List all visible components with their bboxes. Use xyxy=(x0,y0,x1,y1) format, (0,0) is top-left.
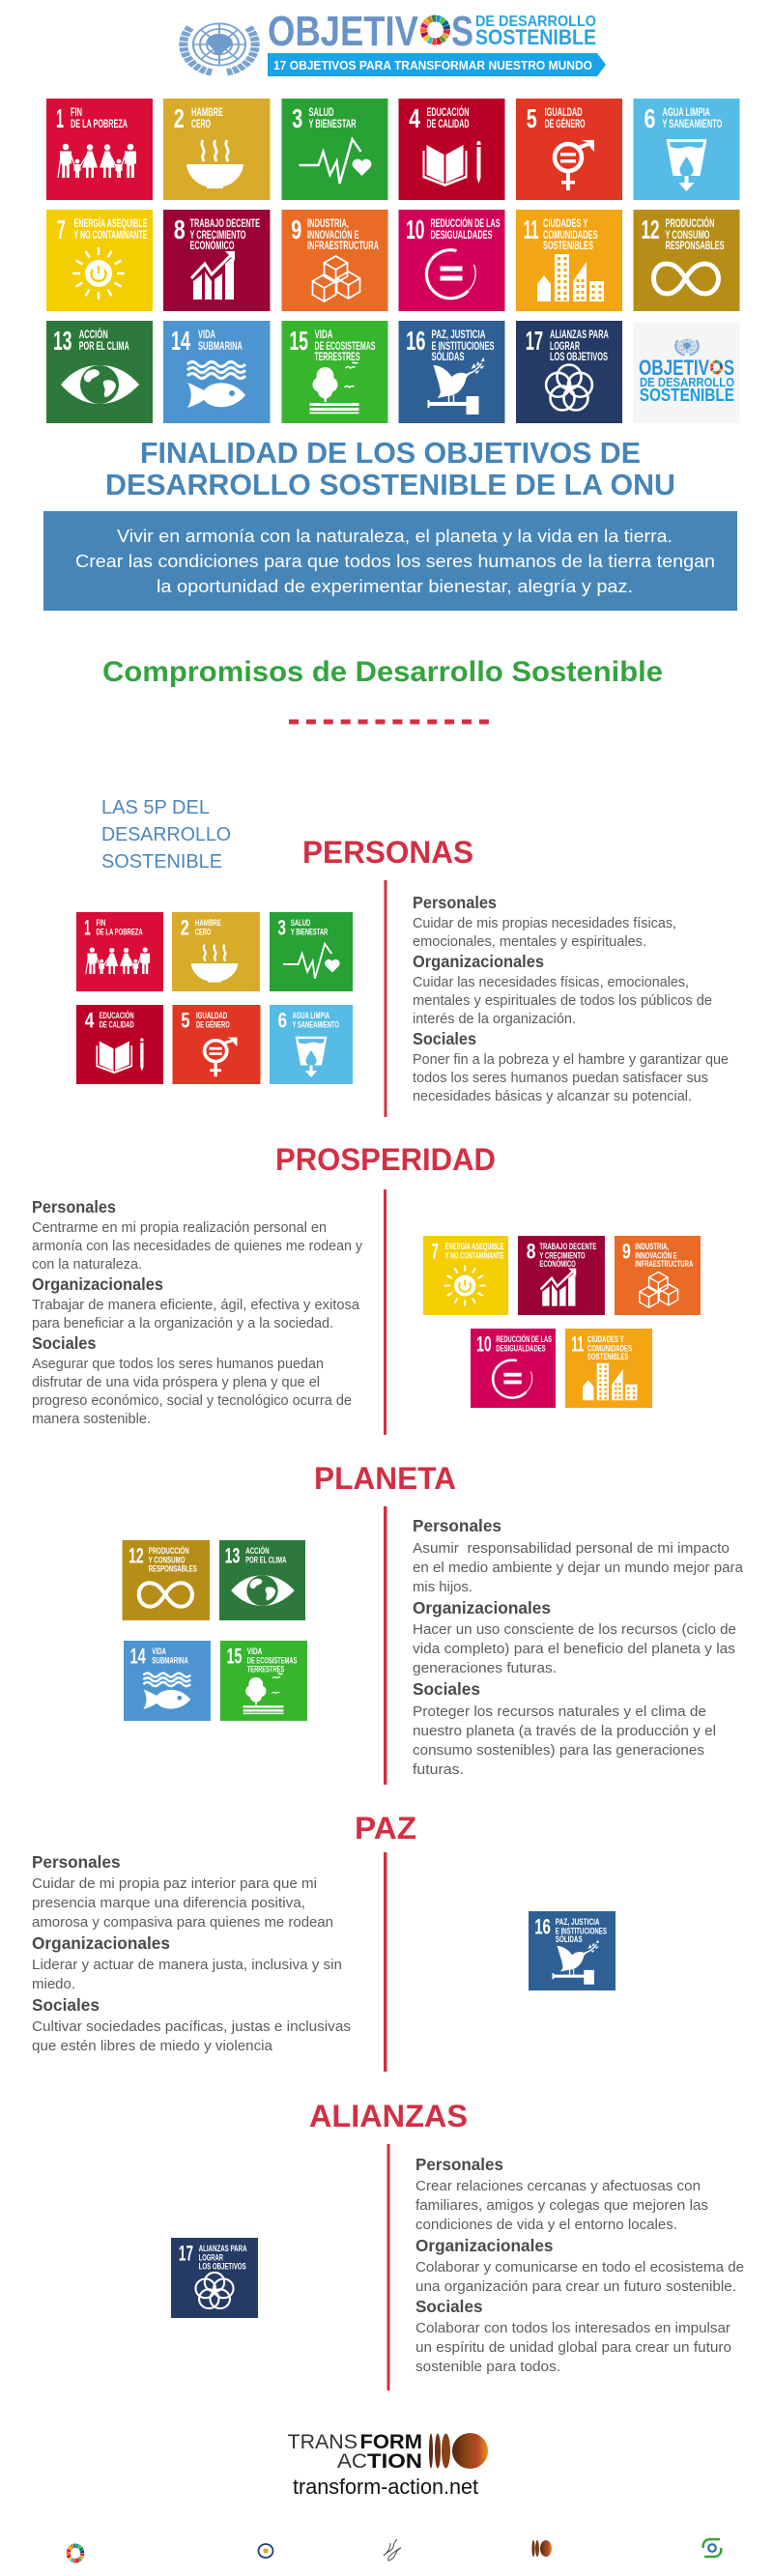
tile: SDG logo xyxy=(634,323,740,423)
goal tiles 12 to 15: VIDA xyxy=(247,1646,262,1657)
text: commitments paz: Liderar y actuar de manera justa, inclusiva y sin xyxy=(32,1957,342,1973)
goal tiles 1 to 6: Y SANEAMIENTO xyxy=(292,1019,339,1029)
tile: goal 16 xyxy=(398,321,504,423)
text: commitments prosperidad: manera sostenible. xyxy=(32,1411,151,1427)
goal tile 17: ALIANZAS PARA xyxy=(199,2244,247,2254)
text: commitments planeta xyxy=(413,1516,744,1778)
text: commitments planeta: mis hijos. xyxy=(413,1579,472,1595)
tile: goal 13: ACCIÓN xyxy=(79,327,108,341)
tile: goal 11 xyxy=(516,210,622,311)
text: commitments personas: mentales y espirituales de todos los públicos de xyxy=(413,992,712,1009)
tile: goal 8: 8 xyxy=(174,215,186,244)
text: commitments prosperidad: disfrutar de una vida próspera y plena y que el xyxy=(32,1374,320,1390)
tile: goal 3 xyxy=(282,99,388,200)
goal tiles 1 to 6: 2 xyxy=(181,916,189,939)
link: website: transform-action.net xyxy=(293,2475,478,2499)
text: commitments alianzas: Colaborar y comunicarse en todo el ecosistema de xyxy=(415,2259,744,2275)
subheading: las 5P xyxy=(101,797,231,873)
goal tiles 7 to 11: INNOVACIÓN E xyxy=(635,1250,677,1261)
goal tiles 12 to 15: 13 xyxy=(225,1544,240,1568)
text: commitments alianzas: Personales xyxy=(415,2155,503,2174)
text: commitments planeta: Personales xyxy=(413,1516,501,1535)
tile: goal 5: DE GÉNERO xyxy=(545,116,586,130)
tile: goal 13 xyxy=(46,321,153,423)
tile: goal 2: HAMBRE xyxy=(191,105,223,119)
heading: alianzas: ALIANZAS xyxy=(309,2099,468,2133)
tile: goal 16: PAZ, JUSTICIA xyxy=(431,328,486,341)
tile: goal 2 xyxy=(163,99,271,200)
text: commitments planeta: Hacer un uso consciente de los recursos (ciclo de xyxy=(413,1621,736,1638)
goal tiles 7 to 11: CIUDADES Y xyxy=(587,1334,624,1345)
text: commitments alianzas xyxy=(415,2155,744,2375)
tile: goal 8: TRABAJO DECENTE xyxy=(189,216,260,230)
goal tile 17: LOGRAR xyxy=(199,2253,223,2264)
subheading: las 5P: SOSTENIBLE xyxy=(101,851,222,873)
goal tiles 12 to 15: PRODUCCIÓN xyxy=(149,1545,189,1557)
goal tiles 1 to 6: 4 xyxy=(85,1009,95,1032)
tile: goal 4 xyxy=(398,99,504,200)
subheading: las 5P: DESARROLLO xyxy=(101,824,231,845)
goal tiles 12 to 15 xyxy=(122,1540,307,1721)
tile: goal 9: INDUSTRIA, xyxy=(307,216,349,230)
logo: transform action: AC xyxy=(337,2450,367,2473)
heading: prosperidad: PROSPERIDAD xyxy=(275,1142,496,1177)
panel: purpose statement: la oportunidad de experimentar bienestar, alegría y paz. xyxy=(157,577,633,596)
tile: goal 14: VIDA xyxy=(198,328,215,341)
tile: SDG logo: S xyxy=(724,356,734,380)
goal tiles 12 to 15: VIDA xyxy=(152,1646,166,1657)
logo: transform action: FORM xyxy=(359,2431,422,2453)
goal tiles 7 to 11: ECONÓMICO xyxy=(539,1258,576,1270)
goal tiles 7 to 11: TRABAJO DECENTE xyxy=(539,1242,596,1252)
goal tiles 1 to 6: 1 xyxy=(84,916,91,939)
goal tiles 12 to 15: 15 xyxy=(227,1645,242,1669)
tile: goal 12: Y CONSUMO xyxy=(665,228,709,242)
tile: goal 11: COMUNIDADES xyxy=(543,228,598,242)
goal tiles 12 to 15: 14 xyxy=(130,1645,146,1669)
tile: goal 15 xyxy=(282,321,388,423)
goal tiles 12 to 15: TERRESTRES xyxy=(247,1665,285,1674)
goal tile 17 xyxy=(171,2238,258,2318)
tile: goal 4: 4 xyxy=(409,103,420,133)
title: sostenible: SOSTENIBLE xyxy=(475,25,596,49)
tile: goal 8: Y CRECIMIENTO xyxy=(189,228,245,242)
tile: goal 17: ALIANZAS PARA xyxy=(550,328,609,341)
text: commitments paz xyxy=(32,1852,351,2054)
text: commitments planeta: Sociales xyxy=(413,1679,480,1699)
goal tiles 1 to 6: CERO xyxy=(195,928,212,937)
icon: green swirl xyxy=(703,2539,721,2557)
banner arrow xyxy=(268,53,606,76)
heading: compromisos: Compromisos de Desarrollo Sostenible xyxy=(102,656,663,688)
tile: goal 15: TERRESTRES xyxy=(315,350,359,363)
text: commitments personas: interés de la organización. xyxy=(413,1011,576,1027)
tile: goal 16: 16 xyxy=(406,326,425,356)
tile: goal 17: LOGRAR xyxy=(550,339,580,353)
text: commitments planeta: Asumir responsabilidad personal de mi impacto xyxy=(413,1540,730,1557)
text: commitments prosperidad: Centrarme en mi propia realización personal en xyxy=(32,1219,327,1236)
icon: UN emblem xyxy=(184,23,255,72)
tile: goal 7: ENERGÍA ASEQUIBLE xyxy=(73,215,147,230)
goal tile 16: SÓLIDAS xyxy=(556,1933,583,1945)
logo: transform action: TRANS xyxy=(288,2431,358,2453)
goal tiles 7 to 11: Y CRECIMIENTO xyxy=(539,1251,586,1261)
text: commitments planeta: nuestro planeta (a través de la producción y el xyxy=(413,1723,716,1739)
icon: colored ring xyxy=(419,14,451,46)
tile: goal 7 xyxy=(46,210,153,311)
banner text: 17 OBJETIVOS PARA TRANSFORMAR NUESTRO MUNDO xyxy=(273,59,592,72)
goal tiles 12 to 15: RESPONSABLES xyxy=(149,1564,197,1574)
heading: personas: PERSONAS xyxy=(302,835,473,870)
tile: goal 5 xyxy=(516,99,622,200)
tile: goal 9: INFRAESTRUCTURA xyxy=(307,239,379,252)
title: final letter: S xyxy=(451,8,473,55)
tile: goal 16: E INSTITUCIONES xyxy=(431,339,495,353)
goal tiles 1 to 6: FIN xyxy=(96,918,105,929)
text: commitments prosperidad: Asegurar que todos los seres humanos puedan xyxy=(32,1356,324,1372)
tile: goal 1 xyxy=(46,99,153,200)
text: commitments planeta: futuras. xyxy=(413,1761,464,1778)
heading: planeta: PLANETA xyxy=(314,1461,456,1496)
goal tiles 12 to 15: POR EL CLIMA xyxy=(245,1556,286,1566)
tile: goal 9: INNOVACIÓN E xyxy=(307,227,359,242)
text: commitments paz: Cultivar sociedades pacíficas, justas e inclusivas xyxy=(32,2018,351,2035)
text: commitments personas: todos los seres humanos puedan satisfacer sus xyxy=(413,1070,708,1086)
tile: goal 12: PRODUCCIÓN xyxy=(665,215,715,230)
goal tiles 1 to 6: 5 xyxy=(181,1009,189,1032)
logo: transform action xyxy=(288,2431,488,2473)
goal tiles 7 to 11: 11 xyxy=(571,1332,584,1356)
text: commitments paz: presencia marque una diferencia positiva, xyxy=(32,1895,305,1911)
tile: goal 3: Y BIENESTAR xyxy=(309,117,357,130)
tile: goal 15: VIDA xyxy=(315,328,333,341)
text: commitments paz: Organizacionales xyxy=(32,1933,170,1953)
goal tiles 7 to 11: INDUSTRIA, xyxy=(635,1242,669,1252)
tile: goal 10: REDUCCIÓN DE LAS xyxy=(431,215,501,230)
tile: goal 8 xyxy=(163,210,271,311)
tile: goal 3: 3 xyxy=(292,103,302,133)
text: commitments alianzas: condiciones de vida y el entorno locales. xyxy=(415,2217,677,2233)
goal tiles 12 to 15: DE ECOSISTEMAS xyxy=(247,1656,298,1667)
text: commitments prosperidad: Trabajar de manera eficiente, ágil, efectiva y exitosa xyxy=(32,1297,360,1313)
goal tiles 7 to 11: 7 xyxy=(432,1240,439,1263)
goal tile 16: E INSTITUCIONES xyxy=(556,1927,607,1936)
text: commitments paz: Sociales xyxy=(32,1995,100,2015)
tile: goal 2: CERO xyxy=(191,117,211,130)
tile: goal 4: EDUCACIÓN xyxy=(427,104,470,119)
goal tiles 1 to 6: 3 xyxy=(277,915,286,939)
tile: goal 11: CIUDADES Y xyxy=(543,216,587,230)
tile: SDG logo: SOSTENIBLE xyxy=(640,386,734,405)
text: commitments personas: necesidades básicas y alcanzar su potencial. xyxy=(413,1088,692,1104)
text: commitments alianzas: una organización para crear un futuro sostenible. xyxy=(415,2278,736,2295)
tile: goal 4: DE CALIDAD xyxy=(427,117,470,130)
text: commitments prosperidad: con la naturaleza. xyxy=(32,1256,142,1273)
goal tile 17: 17 xyxy=(179,2242,193,2266)
text: commitments personas xyxy=(413,893,729,1104)
heading: finalidad: DESARROLLO SOSTENIBLE DE LA ONU xyxy=(105,468,675,501)
panel: header logo xyxy=(184,8,606,76)
text: commitments planeta: Proteger los recursos naturales y el clima de xyxy=(413,1703,706,1720)
text: commitments prosperidad: armonía con las necesidades de quienes me rodean y xyxy=(32,1238,362,1254)
icon: navy target xyxy=(259,2544,272,2558)
text: commitments prosperidad: Sociales xyxy=(32,1333,97,1353)
text: commitments planeta: en el medio ambiente y dejar un mundo mejor para xyxy=(413,1560,744,1576)
goal tiles 1 to 6: SALUD xyxy=(291,918,310,928)
tile: goal 17: 17 xyxy=(526,326,543,356)
tile: goal 5: IGUALDAD xyxy=(545,105,583,119)
tile: goal 7: 7 xyxy=(57,215,66,244)
text: commitments alianzas: familiares, amigos y colegas que mejoren las xyxy=(415,2197,708,2214)
tile: goal 13: POR EL CLIMA xyxy=(79,339,129,353)
tile: goal 8: ECONÓMICO xyxy=(189,238,234,252)
tile: goal 12 xyxy=(634,210,740,311)
goal tiles 7 to 11: Y NO CONTAMINANTE xyxy=(445,1251,504,1261)
goal tile 17: LOS OBJETIVOS xyxy=(199,2262,246,2272)
tile: goal 13: 13 xyxy=(53,326,72,356)
goal tiles 1 to 6 xyxy=(76,912,353,1084)
section: personas xyxy=(76,835,729,1117)
panel: grid of 17 goals xyxy=(46,99,740,423)
text: commitments alianzas: Colaborar con todos los interesados en impulsar xyxy=(415,2320,730,2336)
tile: goal 7: Y NO CONTAMINANTE xyxy=(73,228,147,242)
tile: goal 16: SÓLIDAS xyxy=(431,349,464,363)
goal tiles 1 to 6: HAMBRE xyxy=(195,918,221,929)
panel: purpose statement xyxy=(43,511,737,611)
text: commitments personas: Sociales xyxy=(413,1029,476,1048)
text: commitments paz: miedo. xyxy=(32,1976,75,1992)
tile: goal 11: SOSTENIBLES xyxy=(543,239,593,252)
goal tiles 1 to 6: AGUA LIMPIA xyxy=(292,1011,329,1020)
goal tiles 7 to 11 xyxy=(423,1236,701,1408)
text: commitments prosperidad xyxy=(32,1197,362,1427)
tile: goal 6 xyxy=(634,99,740,200)
heading: paz: PAZ xyxy=(355,1811,416,1846)
text: commitments alianzas: un espíritu de unidad global para crear un futuro xyxy=(415,2339,731,2356)
title: Objetivos: OBJETIV xyxy=(268,8,419,55)
tile: goal 1: FIN xyxy=(71,105,82,119)
text: commitments prosperidad: Organizacionales xyxy=(32,1274,163,1294)
text: commitments prosperidad: para beneficiar a la organización y a la sociedad. xyxy=(32,1315,333,1331)
tile: goal 6: 6 xyxy=(644,103,655,133)
panel: purpose statement: Vivir en armonía con la naturaleza, el planeta y la vida en la tierra. xyxy=(117,527,673,546)
text: commitments alianzas: sostenible para todos. xyxy=(415,2359,560,2375)
tile: goal 10: 10 xyxy=(406,215,424,244)
tile: SDG logo: DE DESARROLLO xyxy=(640,375,734,389)
tile: SDG logo: OBJETIV xyxy=(639,356,709,380)
tile: goal 9: 9 xyxy=(291,215,301,244)
tile: goal 5: 5 xyxy=(527,103,537,133)
panel: purpose statement: Crear las condiciones para que todos los seres humanos de la tierra tengan xyxy=(75,552,715,571)
section: paz xyxy=(32,1811,616,2072)
goal tile 16: PAZ, JUSTICIA xyxy=(556,1917,600,1928)
goal tile 16: 16 xyxy=(534,1915,551,1938)
text: commitments planeta: consumo sostenibles) para las generaciones xyxy=(413,1742,704,1759)
text: commitments alianzas: Organizacionales xyxy=(415,2236,554,2255)
tile: goal 15: DE ECOSISTEMAS xyxy=(315,339,375,353)
tile: goal 17 xyxy=(516,321,622,423)
text: commitments personas: Poner fin a la pobreza y el hambre y garantizar que xyxy=(413,1051,729,1068)
goal tiles 7 to 11: SOSTENIBLES xyxy=(587,1352,629,1362)
tile: goal 10 xyxy=(398,210,504,311)
subheading: las 5P: LAS 5P DEL xyxy=(101,797,210,818)
icon: sketch xyxy=(384,2539,401,2561)
tile: goal 6: Y SANEAMIENTO xyxy=(663,117,723,130)
text: commitments planeta: Organizacionales xyxy=(413,1598,551,1617)
icon: brown ellipses xyxy=(531,2540,552,2557)
heading: finalidad xyxy=(105,436,675,501)
tile: goal 1: 1 xyxy=(56,103,64,133)
goal tiles 7 to 11: INFRAESTRUCTURA xyxy=(635,1259,693,1270)
section: alianzas xyxy=(171,2099,744,2390)
tile: goal 2: 2 xyxy=(174,103,185,133)
goal tiles 12 to 15: ACCIÓN xyxy=(245,1545,270,1557)
tile: goal 6: AGUA LIMPIA xyxy=(663,105,710,119)
text: commitments prosperidad: progreso económico, social y tecnológico ocurra de xyxy=(32,1392,352,1409)
goal tiles 1 to 6: 6 xyxy=(278,1008,287,1032)
goal tiles 7 to 11: 10 xyxy=(476,1332,492,1356)
tile: goal 15: 15 xyxy=(290,326,308,356)
tile: goal 9 xyxy=(282,210,388,311)
tile: goal 1: DE LA POBREZA xyxy=(71,117,128,130)
goal tiles 1 to 6: EDUCACIÓN xyxy=(100,1010,134,1021)
text: commitments alianzas: Sociales xyxy=(415,2297,483,2316)
tile: goal 12: 12 xyxy=(642,215,659,244)
section: prosperidad xyxy=(32,1142,701,1435)
goal tiles 7 to 11: 8 xyxy=(527,1240,535,1263)
heading: finalidad: FINALIDAD DE LOS OBJETIVOS DE xyxy=(140,436,641,470)
icon: colored ring xyxy=(66,2542,85,2564)
goal tiles 7 to 11: COMUNIDADES xyxy=(587,1344,633,1354)
text: commitments personas: Organizacionales xyxy=(413,952,544,971)
goal tiles 7 to 11: DESIGUALDADES xyxy=(496,1344,546,1354)
tile: goal 3: SALUD xyxy=(309,105,334,119)
goal tiles 7 to 11: REDUCCIÓN DE LAS xyxy=(496,1333,552,1345)
section: planeta xyxy=(122,1461,744,1785)
logo: transform action: TION xyxy=(367,2450,422,2473)
goal tile 16 xyxy=(529,1911,616,1990)
goal tiles 12 to 15: SUBMARINA xyxy=(152,1656,188,1667)
text: commitments prosperidad: Personales xyxy=(32,1197,116,1216)
tile: goal 10: DESIGUALDADES xyxy=(431,228,493,242)
text: commitments planeta: vida completo) para el beneficio del planeta y las xyxy=(413,1641,735,1657)
goal tiles 1 to 6: DE LA POBREZA xyxy=(96,928,143,937)
title: de desarrollo: DE DESARROLLO xyxy=(475,14,596,30)
footer icons xyxy=(66,2539,721,2564)
tile: goal 12: RESPONSABLES xyxy=(665,239,725,252)
text: commitments personas: emocionales, mentales y espirituales. xyxy=(413,933,646,950)
goal tiles 12 to 15: Y CONSUMO xyxy=(149,1556,186,1566)
text: commitments personas: Cuidar las necesidades físicas, emocionales, xyxy=(413,974,689,990)
text: commitments alianzas: Crear relaciones cercanas y afectuosas con xyxy=(415,2178,701,2194)
tile: goal 14 xyxy=(163,321,271,423)
text: commitments paz: amorosa y compasiva para quienes me rodean xyxy=(32,1914,333,1931)
goal tiles 7 to 11: ENERGÍA ASEQUIBLE xyxy=(445,1242,504,1252)
goal tiles 1 to 6: DE GÉNERO xyxy=(196,1020,230,1030)
goal tiles 12 to 15: 12 xyxy=(129,1544,144,1568)
tile: goal 17: LOS OBJETIVOS xyxy=(550,350,608,363)
goal tiles 1 to 6: Y BIENESTAR xyxy=(291,927,328,936)
text: commitments paz: Cuidar de mi propia paz interior para que mi xyxy=(32,1875,317,1892)
tile: goal 14: SUBMARINA xyxy=(198,339,243,353)
text: commitments personas: Cuidar de mis propias necesidades físicas, xyxy=(413,915,676,931)
text: commitments paz: Personales xyxy=(32,1852,121,1872)
tile: goal 11: 11 xyxy=(524,215,539,244)
text: commitments planeta: generaciones futuras. xyxy=(413,1660,557,1676)
tile: goal 14: 14 xyxy=(171,326,190,356)
goal tiles 7 to 11: 9 xyxy=(622,1240,631,1263)
goal tiles 1 to 6: DE CALIDAD xyxy=(100,1020,134,1030)
goal tiles 1 to 6: IGUALDAD xyxy=(196,1011,227,1021)
text: commitments paz: que estén libres de miedo y violencia xyxy=(32,2038,273,2054)
text: commitments personas: Personales xyxy=(413,893,497,912)
